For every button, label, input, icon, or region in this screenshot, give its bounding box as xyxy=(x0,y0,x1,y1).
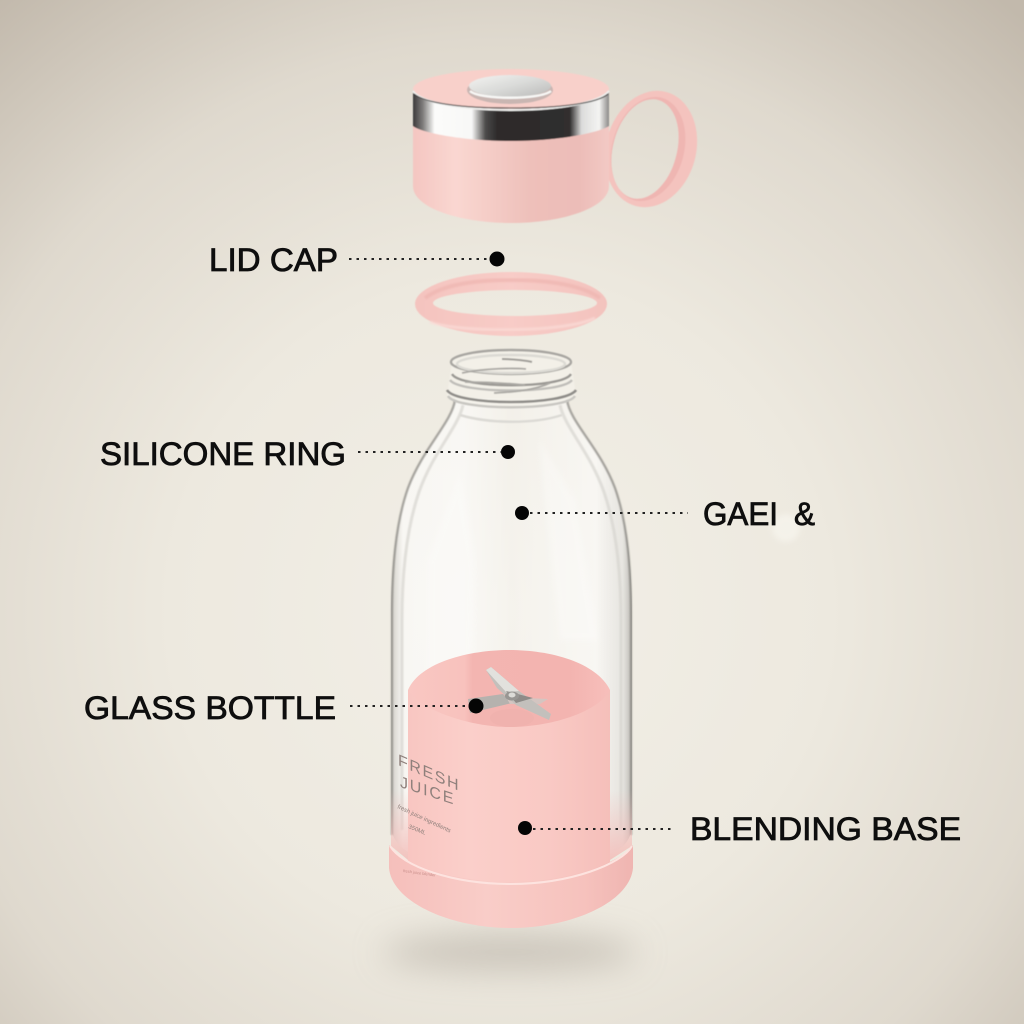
inner cup xyxy=(408,690,610,884)
callout: glass bottle xyxy=(84,690,484,726)
product label: FRESH xyxy=(398,751,460,795)
lid body xyxy=(413,126,609,223)
callout: silicone ring: SILICONE RING xyxy=(100,436,346,472)
product label: JUICE xyxy=(400,773,455,809)
silicone ring xyxy=(415,272,607,336)
base foot xyxy=(389,845,633,928)
lid top xyxy=(413,69,609,109)
chrome band xyxy=(413,91,609,141)
product label xyxy=(396,751,460,837)
callout: glass bottle: GLASS BOTTLE xyxy=(84,690,336,726)
callout: blending base: BLENDING BASE xyxy=(690,811,961,847)
callout: lid cap xyxy=(209,242,504,278)
blade assembly xyxy=(468,667,551,727)
floor shadow xyxy=(382,934,638,970)
base markings: fresh juice blender xyxy=(403,868,437,878)
callout: lid cap: LID CAP xyxy=(209,242,338,278)
callout: blending base xyxy=(518,811,961,847)
bottle body xyxy=(391,398,632,853)
lid cap xyxy=(413,69,697,223)
callout: gael: GAEI xyxy=(703,496,778,532)
cup opening xyxy=(408,650,610,727)
callout: gael: & xyxy=(794,496,815,532)
callout: silicone ring xyxy=(100,436,515,472)
callout: gael xyxy=(515,496,815,542)
product label: 350ML xyxy=(407,824,427,837)
product label: fresh juice ingredients xyxy=(396,804,452,834)
blending base xyxy=(389,650,633,928)
glass bottle xyxy=(391,350,632,860)
glass highlights xyxy=(428,470,475,800)
bottle neck xyxy=(447,350,576,422)
metal button xyxy=(467,75,553,104)
pink reflection at glass foot xyxy=(391,790,632,860)
icon: carry loop handle xyxy=(605,91,697,207)
